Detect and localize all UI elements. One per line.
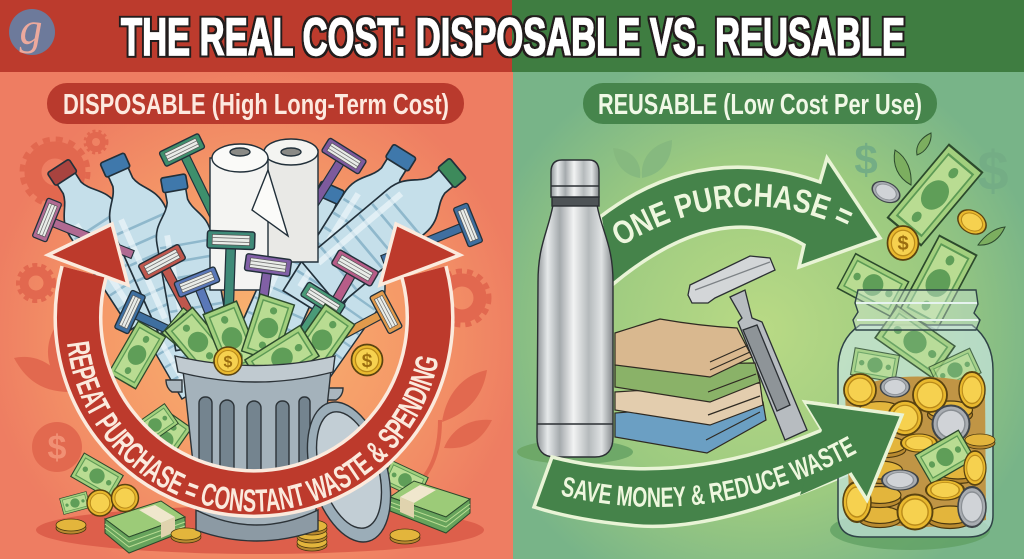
disposable heading pill: DISPOSABLE (High Long-Term Cost) [63, 89, 449, 121]
glass jar [837, 236, 995, 537]
ground shadow [36, 506, 484, 554]
background sprout [613, 140, 672, 178]
arrow label: one purchase: ONE PURCHASE = [613, 184, 853, 244]
background dollar signs [854, 136, 1009, 202]
disposable razors [32, 198, 483, 394]
save money arrow head over jar and label [562, 400, 904, 507]
background leaves and dollar coin [14, 320, 492, 490]
safety razor [688, 256, 807, 440]
falling money and coins [869, 133, 1005, 260]
trash can lid [293, 392, 405, 552]
arrow label: repeat purchase: REPEAT PURCHASE = CONSTANT WASTE & SPENDING [67, 341, 438, 512]
save money arrow [534, 402, 902, 526]
panel: disposable [0, 72, 513, 559]
trash can [166, 356, 343, 541]
disposable bottles [34, 135, 477, 399]
logo badge: g [20, 3, 42, 54]
background dollar signs: $ [977, 139, 1009, 202]
jar shadow [830, 510, 990, 550]
circular arrow: repeat purchase [44, 222, 464, 518]
coins by the trash can [214, 344, 382, 376]
money piles [56, 404, 470, 553]
folded towels [615, 319, 766, 453]
one purchase arrow [600, 154, 883, 286]
background dollar signs: $ [854, 136, 878, 183]
background gears [18, 131, 489, 325]
reusable heading pill [583, 83, 937, 124]
logo badge [9, 3, 55, 55]
arrow label: save money: SAVE MONEY & REDUCE WASTE [562, 436, 857, 507]
coins by the trash can: $ [362, 351, 373, 372]
paper towel rolls [159, 133, 367, 290]
bottle shadow [517, 440, 633, 464]
disposable heading pill [47, 83, 464, 124]
coins by the trash can: $ [224, 354, 233, 371]
dollar sign on background coin: $ [48, 429, 67, 467]
bills in trash can [108, 294, 355, 390]
steel bottle [537, 160, 613, 457]
header band [0, 0, 1024, 72]
falling money and coins: $ [897, 233, 909, 255]
panel: reusable [513, 72, 1024, 559]
reusable heading pill: REUSABLE (Low Cost Per Use) [598, 89, 922, 121]
